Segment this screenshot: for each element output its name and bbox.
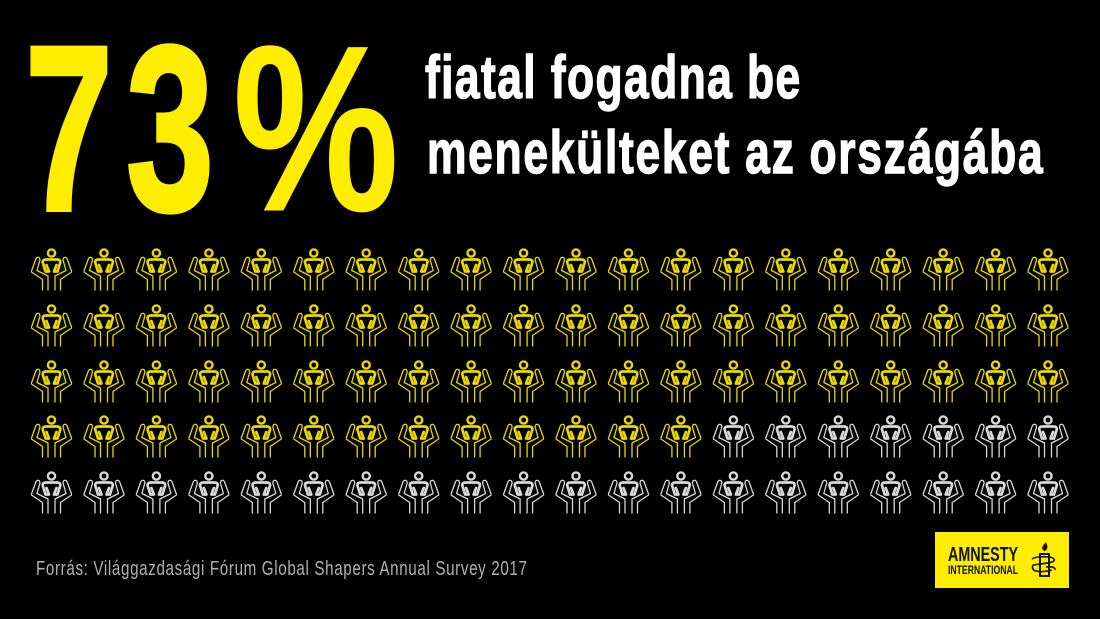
- big number 73%: %: [233, 0, 399, 261]
- Amnesty International logo: INTERNATIONAL: [948, 565, 1018, 577]
- row 3 of icons: [32, 361, 1068, 402]
- heading text: [425, 45, 1043, 187]
- row 1 of icons: [32, 249, 1068, 290]
- pictogram grid: 73 yellow of 100: [32, 249, 1068, 513]
- big number 73%: [25, 0, 399, 261]
- source text: Forrás: Világgazdasági Fórum Global Shapers Annual Survey 2017: [36, 557, 527, 580]
- row 4 of icons: 7 white: [713, 416, 1068, 457]
- heading text: menekülteket az országába: [427, 120, 1043, 187]
- row 5 of icons: white: [32, 472, 1068, 513]
- big number 73%: 7: [25, 0, 113, 261]
- row 4 of icons: 13 yellow: [32, 416, 701, 457]
- big number 73%: 3: [126, 0, 214, 261]
- Amnesty International logo: [935, 532, 1069, 588]
- icon: candle in barbed wire: [1032, 542, 1055, 576]
- Amnesty International logo: AMNESTY: [948, 544, 1018, 566]
- heading text: fiatal fogadna be: [425, 45, 800, 112]
- row 2 of icons: [32, 305, 1068, 346]
